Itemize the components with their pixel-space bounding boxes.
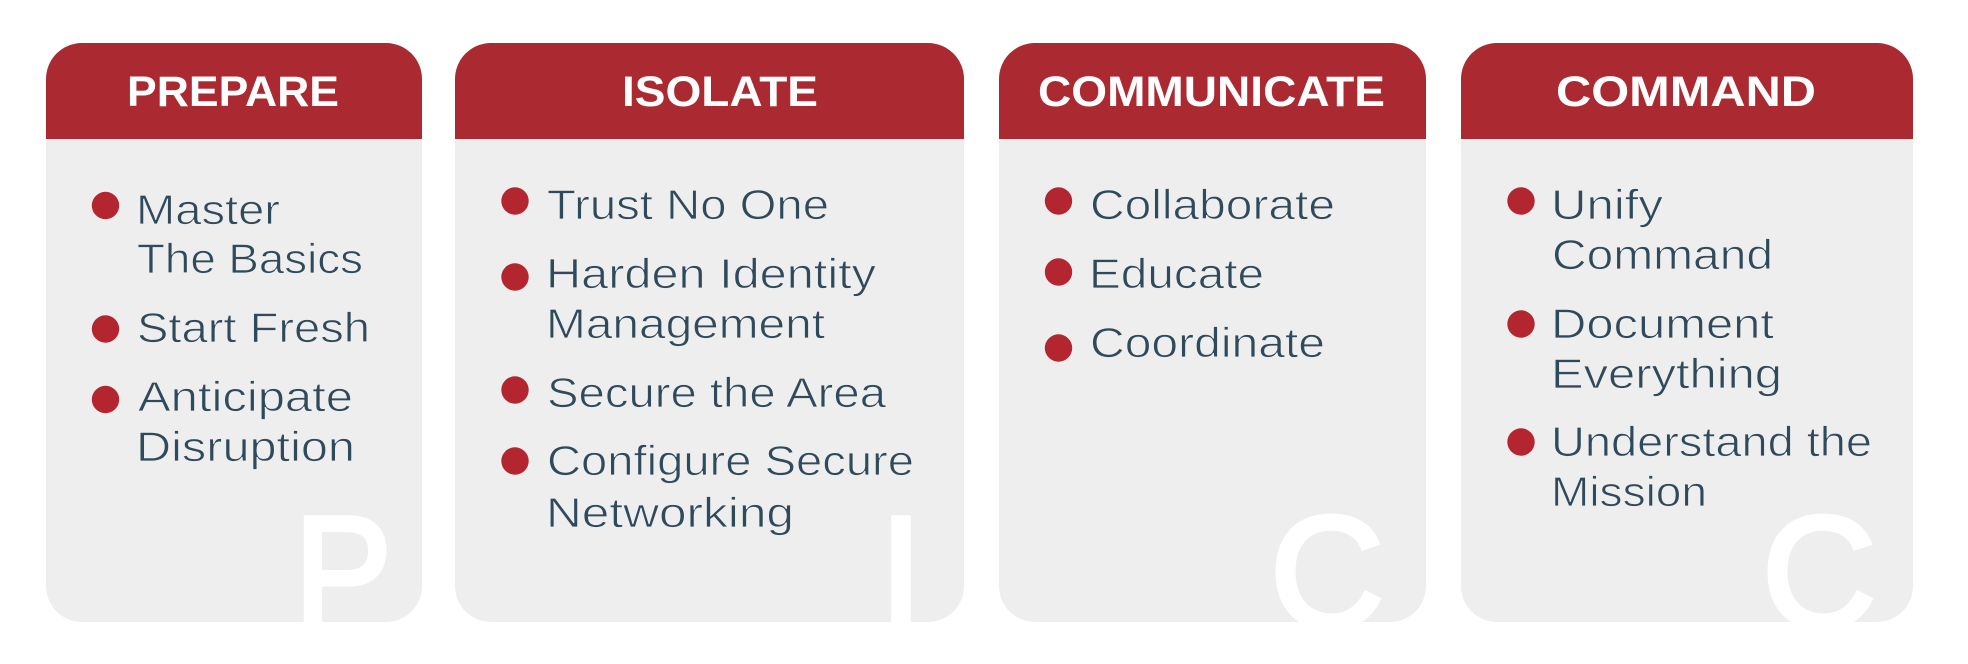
watermark letter C: C (1270, 484, 1384, 660)
bullet: anticipate disruption (92, 373, 355, 470)
bullet: educate: Educate (1089, 250, 1264, 297)
bullet: master the basics (92, 186, 363, 282)
bullet: document everything (1507, 300, 1782, 397)
header bar: isolate (455, 43, 964, 139)
header bar: communicate (999, 43, 1426, 139)
header bar: command (1461, 43, 1913, 139)
bullet: understand the mission: Understand the (1551, 418, 1872, 465)
bullet: master the basics: The Basics (137, 235, 363, 282)
panel: isolate (455, 43, 964, 660)
bullet: harden identity management: Harden Identity (546, 250, 876, 297)
bullet: unify command: Command (1552, 231, 1773, 278)
bullet: configure secure networking: Configure Secure (547, 437, 914, 484)
bullet: secure the area: Secure the Area (547, 369, 887, 416)
bullet: anticipate disruption: Anticipate (138, 373, 353, 420)
bullet: start fresh: Start Fresh (137, 304, 370, 351)
bullet: understand the mission: Mission (1551, 468, 1707, 515)
watermark letter I: I (879, 484, 923, 660)
watermark letter P: P (294, 484, 392, 660)
bullet: trust no one: Trust No One (547, 181, 829, 228)
heading: command: COMMAND (1556, 68, 1816, 116)
heading: communicate: COMMUNICATE (1038, 68, 1385, 116)
bullet: document everything: Document (1551, 300, 1775, 347)
bullet: configure secure networking (501, 437, 914, 536)
header bar: prepare (46, 43, 422, 139)
watermark letter C: C (1762, 484, 1876, 660)
bullet: anticipate disruption: Disruption (136, 423, 355, 470)
bullet: unify command (1507, 181, 1773, 278)
bullet: harden identity management: Management (546, 300, 826, 347)
panel: command (1461, 43, 1913, 660)
bullet: coordinate: Coordinate (1090, 319, 1325, 366)
bullet: educate (1045, 250, 1264, 297)
bullet: understand the mission (1507, 418, 1872, 515)
panel: communicate (999, 43, 1426, 660)
bullet: harden identity management (501, 250, 876, 347)
bullet: unify command: Unify (1551, 181, 1663, 228)
heading: prepare: PREPARE (127, 68, 339, 116)
bullet: collaborate: Collaborate (1090, 181, 1335, 228)
panel: prepare (46, 43, 422, 660)
heading: isolate: ISOLATE (622, 68, 818, 116)
bullet: configure secure networking: Networking (546, 489, 794, 536)
bullet: document everything: Everything (1551, 350, 1782, 397)
bullet: master the basics: Master (136, 186, 280, 233)
